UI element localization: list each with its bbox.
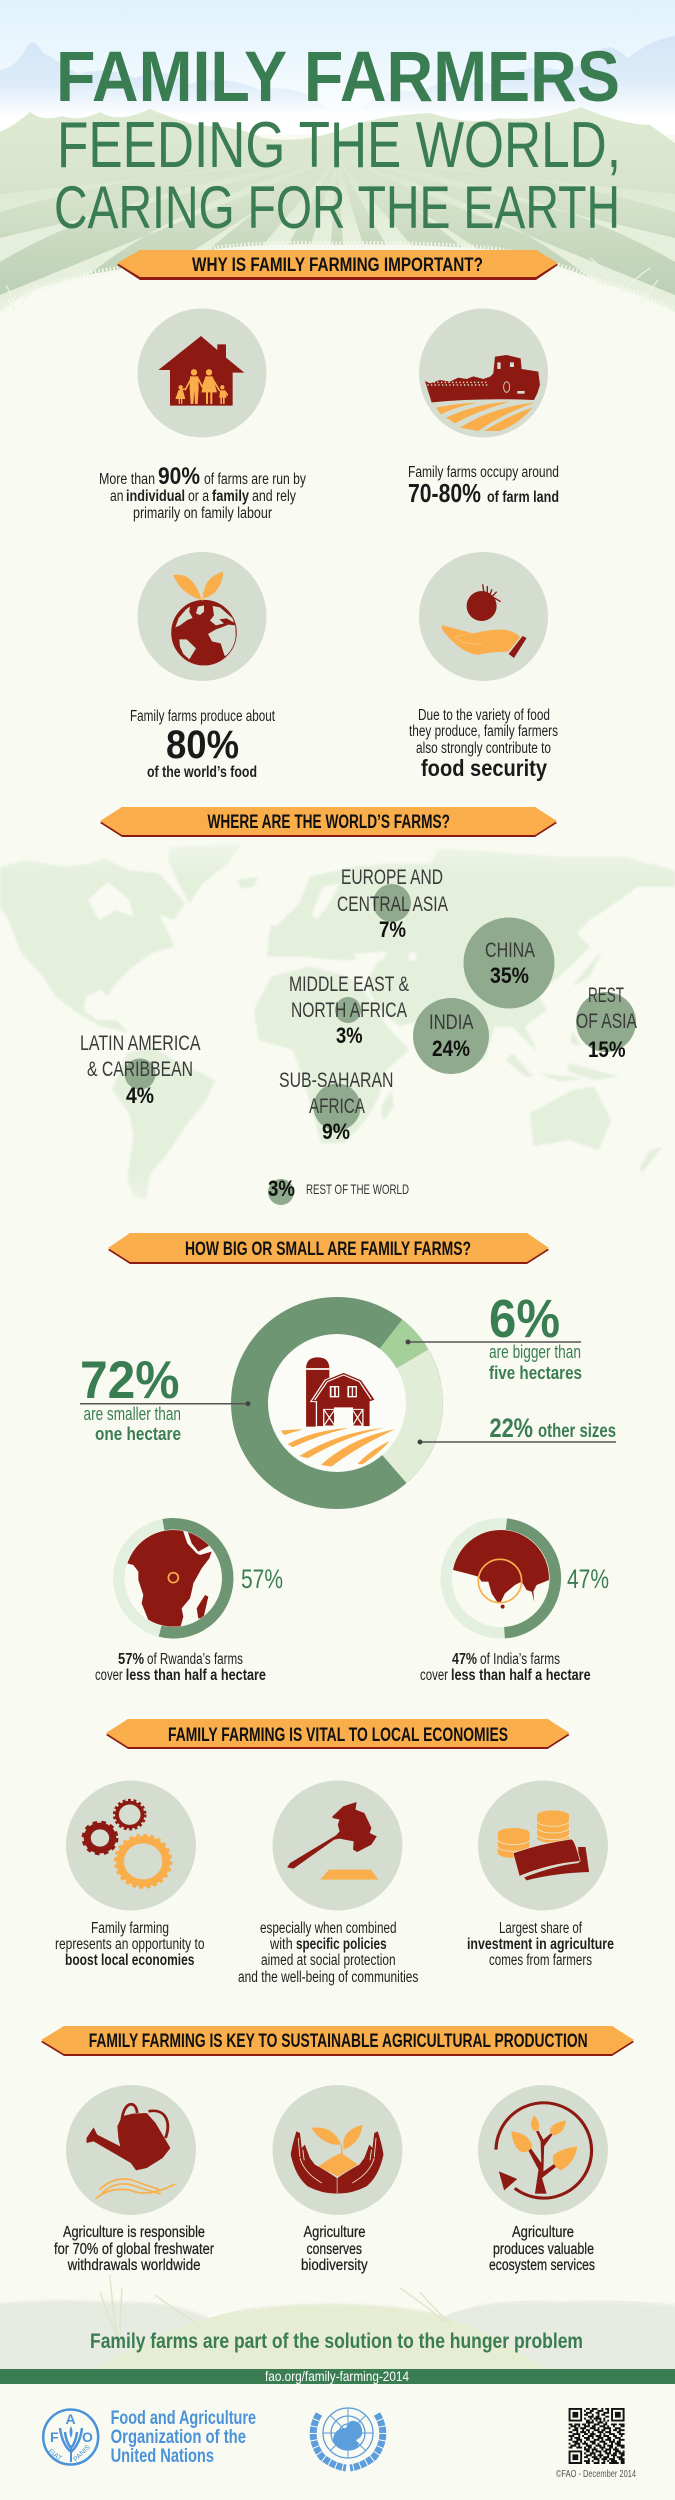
text: 90 percent of farms: an bbox=[110, 488, 124, 505]
bubble: rest of the world: 3% bbox=[268, 1176, 295, 1201]
bubble: Rest of Asia bbox=[576, 984, 637, 1062]
text: 90 percent of farms: More than bbox=[99, 471, 155, 488]
bubble: rest of the world: REST OF THE WORLD bbox=[306, 1181, 409, 1197]
text: 90 percent of farms: or a bbox=[188, 488, 209, 505]
panel: why family farming matters bbox=[99, 308, 559, 781]
ring: India 47 percent bbox=[446, 1510, 609, 1633]
bubble: China: 35% bbox=[490, 963, 529, 988]
callout: 6 percent: five hectares bbox=[489, 1363, 582, 1383]
text: FAO name: Food and Agriculture bbox=[111, 2408, 256, 2429]
banner: where are the world's farms bbox=[100, 807, 557, 837]
text: specific policies bbox=[238, 1920, 419, 1986]
icon: watering can bbox=[66, 2085, 196, 2215]
copyright note: ©FAO - December 2014 bbox=[556, 2468, 636, 2480]
text: ecosystem services: ecosystem services bbox=[489, 2257, 595, 2274]
text: 70-80 percent of farm land: of farm land bbox=[487, 489, 559, 506]
bubble: Latin America and Caribbean: LATIN AMERICA bbox=[80, 1032, 200, 1055]
text: freshwater withdrawals bbox=[54, 2224, 214, 2274]
text: freshwater withdrawals: for 70% of global freshwater bbox=[54, 2241, 214, 2258]
text: conserves biodiversity: Agriculture bbox=[304, 2224, 366, 2241]
text: 70-80 percent of farm land: 70-80% bbox=[408, 478, 481, 508]
donut chart: farm sizes bbox=[231, 1297, 443, 1509]
banner: why is family farming important bbox=[117, 250, 558, 280]
callout: 22 percent: 22% bbox=[490, 1413, 533, 1443]
callout: 72 percent: 72% bbox=[80, 1351, 180, 1410]
callout: 22 percent: other sizes bbox=[538, 1421, 616, 1442]
icon: tractor in field bbox=[419, 308, 548, 438]
caption: India farms bbox=[420, 1651, 591, 1684]
bubble: India: 24% bbox=[432, 1036, 470, 1061]
callout: 72 percent: one hectare bbox=[95, 1424, 181, 1444]
bubble: India bbox=[413, 998, 489, 1074]
caption: Rwanda farms bbox=[95, 1651, 266, 1684]
text: investment in agriculture: Largest share of bbox=[499, 1920, 583, 1937]
text: FAO name bbox=[111, 2408, 256, 2467]
logo: FAO emblem: A bbox=[66, 2411, 76, 2427]
text: 90 percent of farms: of farms are run by bbox=[204, 471, 306, 488]
bubble: Middle East and North Africa: 3% bbox=[336, 1023, 362, 1048]
text: food security: food security bbox=[421, 755, 547, 781]
text: specific policies: aimed at social protection bbox=[261, 1952, 396, 1969]
text: 90 percent of farms: family bbox=[212, 488, 249, 505]
caption: India farms: of India’s farms bbox=[480, 1651, 560, 1668]
text: FAO name: United Nations bbox=[111, 2446, 214, 2467]
text: investment in agriculture: investment in agriculture bbox=[467, 1936, 614, 1953]
text: boost local economies: Family farming bbox=[91, 1920, 169, 1937]
text: freshwater withdrawals: Agriculture is responsible bbox=[63, 2224, 205, 2241]
bubble: Middle East and North Africa: MIDDLE EAST & bbox=[289, 973, 409, 996]
caption: Rwanda farms: of Rwanda’s farms bbox=[147, 1651, 243, 1668]
title: FAMILY FARMERS bbox=[56, 38, 620, 117]
panel: local economies bbox=[55, 1780, 614, 1986]
caption: India farms: 47% bbox=[452, 1651, 477, 1668]
text: 90 percent of farms bbox=[99, 463, 306, 522]
text: 70-80 percent of farm land: Family farms occupy around bbox=[408, 464, 559, 481]
text: conserves biodiversity: biodiversity bbox=[301, 2257, 368, 2274]
text: conserves biodiversity: conserves bbox=[306, 2241, 362, 2258]
callout: 6 percent: are bigger than bbox=[489, 1342, 581, 1362]
bubble: rest of the world bbox=[268, 1176, 409, 1205]
banner: sustainable agricultural production bbox=[41, 2026, 634, 2056]
text: 80 percent of food: Family farms produce about bbox=[130, 708, 276, 725]
text: 90 percent of farms: 90% bbox=[158, 463, 200, 490]
title bbox=[54, 38, 621, 241]
caption: India farms: cover bbox=[420, 1667, 448, 1684]
bubble: Sub-Saharan Africa: SUB-SAHARAN bbox=[279, 1069, 394, 1092]
text: FAO name: Organization of the bbox=[111, 2427, 246, 2448]
text: 90 percent of farms: primarily on family labour bbox=[133, 505, 272, 522]
logo: United Nations emblem bbox=[313, 2408, 383, 2468]
icon: hands holding seedling bbox=[272, 2085, 402, 2215]
icon: gavel bbox=[272, 1780, 402, 1910]
bubble: Latin America and Caribbean: & CARIBBEAN bbox=[87, 1058, 193, 1081]
bubble: Sub-Saharan Africa: AFRICA bbox=[309, 1095, 365, 1118]
text: ecosystem services bbox=[489, 2224, 595, 2274]
icon: house with family bbox=[138, 308, 266, 438]
text: boost local economies bbox=[55, 1920, 204, 1969]
text: boost local economies: represents an opportunity to bbox=[55, 1936, 204, 1953]
text: specific policies: with bbox=[269, 1936, 293, 1953]
logo: FAO emblem: O bbox=[82, 2429, 93, 2445]
text: specific policies: especially when combined bbox=[260, 1920, 396, 1937]
text: conserves biodiversity bbox=[301, 2224, 368, 2274]
panel: sustainable production bbox=[54, 2085, 608, 2274]
logo: FAO emblem: F bbox=[50, 2429, 59, 2445]
bubble: Middle East and North Africa: NORTH AFRICA bbox=[291, 999, 407, 1022]
ring: India 47 percent: 47% bbox=[567, 1564, 609, 1594]
ring: Rwanda 57 percent: 57% bbox=[241, 1564, 283, 1594]
text: investment in agriculture: comes from farmers bbox=[489, 1952, 592, 1969]
bubble: Rest of Asia: OF ASIA bbox=[576, 1010, 637, 1033]
QR code bbox=[569, 2409, 625, 2463]
bubble: Europe and Central Asia: CENTRAL ASIA bbox=[337, 893, 448, 916]
banner: vital to local economies bbox=[106, 1719, 570, 1749]
text: 80 percent of food: of the world’s food bbox=[147, 764, 257, 781]
callout: 6 percent: 6% bbox=[489, 1289, 560, 1349]
text: food security bbox=[409, 707, 558, 781]
bubble: China bbox=[464, 918, 554, 1008]
banner: vital to local economies: FAMILY FARMING IS VITAL TO LOCAL ECONOMIES bbox=[168, 1725, 508, 1746]
text: investment in agriculture bbox=[467, 1920, 614, 1969]
icon: coins and banknotes bbox=[478, 1780, 608, 1910]
bubble: Rest of Asia: REST bbox=[588, 984, 624, 1007]
icon: tree with cycle arrow bbox=[478, 2085, 608, 2215]
icon: South Asia map bbox=[453, 1530, 549, 1609]
bubble: Sub-Saharan Africa bbox=[279, 1069, 394, 1144]
text: 80 percent of food bbox=[130, 708, 276, 781]
icon: gears bbox=[66, 1780, 196, 1910]
bubble: Latin America and Caribbean: 4% bbox=[126, 1083, 154, 1108]
ring: Rwanda 57 percent bbox=[119, 1510, 283, 1643]
bubble: India: INDIA bbox=[429, 1011, 474, 1034]
text: food security: Due to the variety of food bbox=[418, 707, 550, 724]
bubble: Middle East and North Africa bbox=[289, 973, 409, 1048]
banner: where are the world's farms: WHERE ARE THE WORLD’S FARMS? bbox=[208, 812, 450, 833]
banner: why is family farming important: WHY IS FAMILY FARMING IMPORTANT? bbox=[192, 255, 483, 276]
bubble: Sub-Saharan Africa: 9% bbox=[322, 1119, 350, 1144]
text: specific policies: and the well-being of communities bbox=[238, 1969, 419, 1986]
text: freshwater withdrawals: withdrawals worldwide bbox=[67, 2257, 201, 2274]
text: ecosystem services: produces valuable bbox=[493, 2241, 594, 2258]
footer hills background bbox=[0, 2275, 675, 2369]
bubble: China: CHINA bbox=[485, 939, 535, 962]
caption: Rwanda farms: less than half a hectare bbox=[126, 1667, 266, 1684]
header landscape background bbox=[0, 0, 675, 340]
bubble: Europe and Central Asia: EUROPE AND bbox=[341, 866, 443, 889]
footer link bar bbox=[0, 2368, 675, 2384]
callout: 72 percent: are smaller than bbox=[84, 1404, 181, 1424]
icon: Africa map bbox=[127, 1530, 212, 1627]
panel: farm distribution map bubbles bbox=[80, 866, 637, 1205]
icon: globe with sprout bbox=[138, 552, 266, 681]
text: 80 percent of food: 80% bbox=[166, 723, 239, 767]
icon: hand holding tomato bbox=[419, 552, 548, 681]
bubble: Rest of Asia: 15% bbox=[588, 1037, 626, 1062]
banner: how big or small are family farms: HOW BIG OR SMALL ARE FAMILY FARMS? bbox=[185, 1239, 471, 1260]
text: specific policies: specific policies bbox=[296, 1936, 387, 1953]
bubble: Latin America and Caribbean bbox=[80, 1032, 200, 1108]
banner: how big or small are family farms bbox=[108, 1233, 549, 1264]
caption: India farms: less than half a hectare bbox=[451, 1667, 591, 1684]
bubble: Europe and Central Asia bbox=[337, 866, 448, 942]
text: boost local economies: boost local economies bbox=[65, 1952, 194, 1969]
text: food security: they produce, family farmers bbox=[409, 723, 558, 740]
callout: 72 percent bbox=[80, 1351, 250, 1444]
world map background bbox=[0, 843, 675, 1200]
text: 70-80 percent of farm land bbox=[408, 464, 559, 508]
logo: FAO emblem: FIAT bbox=[47, 2448, 63, 2463]
text: 90 percent of farms: and rely bbox=[252, 488, 296, 505]
text: 90 percent of farms: individual bbox=[126, 488, 185, 505]
callout: 22 percent bbox=[418, 1413, 616, 1444]
icon: barn and fields bbox=[281, 1357, 395, 1467]
logo: FAO emblem: PANIS bbox=[72, 2444, 92, 2463]
caption: Rwanda farms: cover bbox=[95, 1667, 123, 1684]
callout: 6 percent bbox=[406, 1289, 582, 1383]
caption: Rwanda farms: 57% bbox=[118, 1651, 144, 1668]
logo: FAO emblem bbox=[43, 2410, 98, 2464]
closing statement: Family farms are part of the solution to the hunger problem bbox=[90, 2330, 583, 2353]
text: food security: also strongly contribute to bbox=[416, 740, 551, 757]
bubble: Europe and Central Asia: 7% bbox=[379, 917, 406, 942]
text: ecosystem services: Agriculture bbox=[512, 2224, 574, 2241]
footer link bar: fao.org/family-farming-2014 bbox=[265, 2368, 409, 2384]
